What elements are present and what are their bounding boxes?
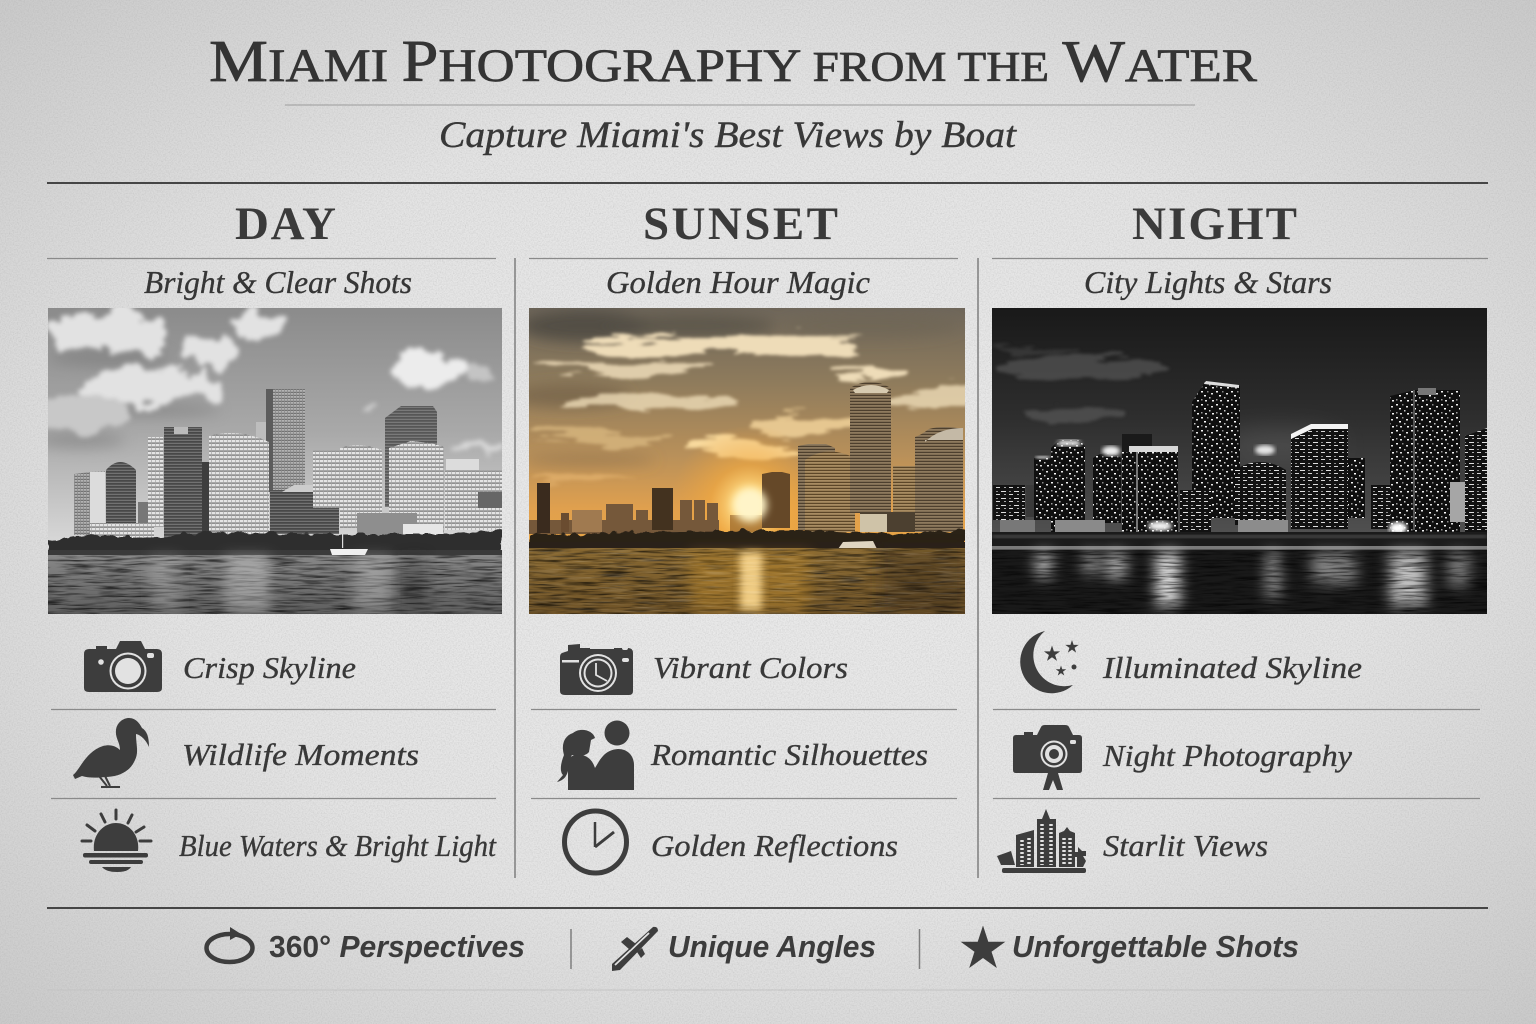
- item: crisp skyline: [84, 641, 356, 692]
- item: vibrant colors: [560, 644, 848, 695]
- item: romantic silhouettes: [557, 720, 928, 790]
- photo: sunset skyline: [510, 308, 978, 614]
- label: illuminated skyline: Illuminated Skyline: [1102, 650, 1362, 685]
- panel: night: [992, 198, 1488, 873]
- icon: rotation loop: [206, 927, 252, 962]
- feature strip: [206, 926, 1299, 971]
- item: blue waters: [82, 810, 497, 872]
- item: illuminated skyline: [1020, 631, 1362, 693]
- item: wildlife moments: [73, 718, 419, 787]
- icon: pen angle tool: [612, 927, 658, 971]
- label: blue waters: Blue Waters & Bright Light: [179, 828, 497, 863]
- icon: moon and stars: [1020, 631, 1079, 693]
- label: golden reflections: Golden Reflections: [651, 828, 898, 863]
- label: romantic silhouettes: Romantic Silhouettes: [650, 737, 928, 772]
- icon: sun over water: [82, 810, 151, 872]
- label: unique angles: Unique Angles: [668, 929, 876, 964]
- icon: pelican: [73, 718, 149, 787]
- item: night photography: [1013, 725, 1352, 790]
- label: crisp skyline: Crisp Skyline: [183, 650, 356, 685]
- panel: day: [34, 198, 504, 872]
- subtitle: Capture Miami's Best Views by Boat: [439, 115, 1018, 156]
- photo: day skyline: [34, 308, 504, 614]
- heading: night: NIGHT: [1132, 198, 1297, 250]
- feature: 360 perspectives: [206, 927, 525, 964]
- item: starlit views: [997, 809, 1268, 873]
- label: vibrant colors: Vibrant Colors: [653, 650, 848, 685]
- label: night photography: Night Photography: [1102, 738, 1352, 773]
- icon: camera with clock lens: [560, 644, 633, 695]
- heading: sunset: SUNSET: [643, 198, 838, 250]
- icon: city buildings: [997, 809, 1086, 873]
- photo: night skyline: [992, 308, 1487, 614]
- label: unforgettable shots: Unforgettable Shots: [1012, 929, 1299, 964]
- heading: day: DAY: [235, 198, 336, 250]
- icon: star: [961, 926, 1005, 968]
- tagline: sunset: Golden Hour Magic: [606, 264, 870, 300]
- icon: couple silhouette: [557, 720, 634, 790]
- panel: sunset: [510, 198, 978, 873]
- feature: unforgettable shots: [961, 926, 1299, 968]
- feature: unique angles: [612, 927, 876, 971]
- title: MIAMI PHOTOGRAPHY FROM THE WATER: [209, 28, 1258, 94]
- label: wildlife moments: Wildlife Moments: [182, 737, 419, 772]
- item: golden reflections: [564, 811, 898, 873]
- label: starlit views: Starlit Views: [1103, 828, 1268, 863]
- icon: camera on tripod: [1013, 725, 1082, 790]
- icon: clock: [564, 811, 626, 873]
- label: 360 perspectives: 360° Perspectives: [269, 929, 525, 964]
- tagline: day: Bright & Clear Shots: [144, 264, 412, 300]
- icon: camera: [84, 641, 162, 692]
- tagline: night: City Lights & Stars: [1084, 264, 1332, 300]
